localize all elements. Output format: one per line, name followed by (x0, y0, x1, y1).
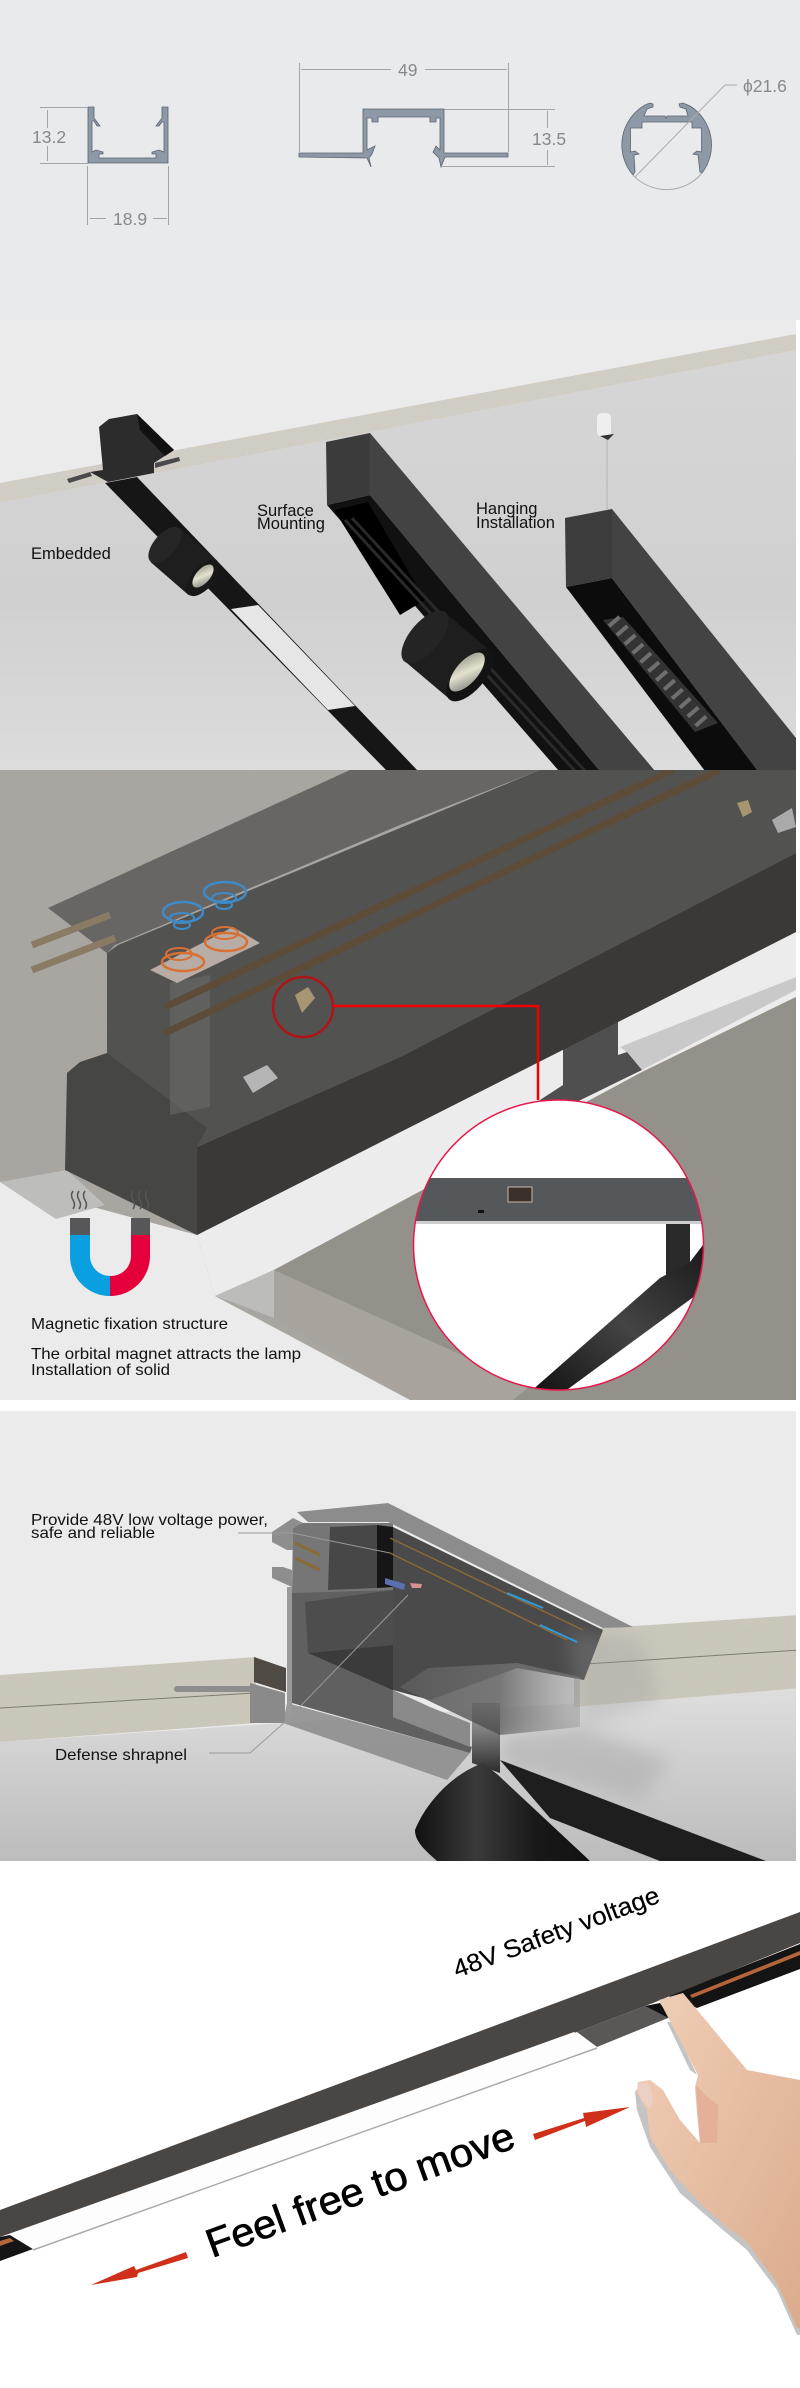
icon: horseshoe magnet (70, 1191, 150, 1296)
diagram: round profile diameter 21.6: ϕ21.6 (743, 76, 787, 96)
text: 48V low voltage power: safe and reliable (31, 1525, 155, 1542)
text: feel free to move: Feel free to move (200, 2114, 520, 2266)
diagram: U profile 18.9 x 13.2: 18.9 (113, 209, 147, 229)
diagram: embedded profile 49 x 13.5: 13.5 (532, 129, 566, 149)
ceiling board (0, 1170, 410, 1400)
panel: magnetic fixation (0, 770, 796, 1400)
text: 48V low voltage power: Provide 48V low voltage power, (31, 1512, 268, 1529)
track cross-section (272, 1503, 670, 1800)
panel: feel free to move (0, 1881, 800, 2335)
text: orbital magnet description: The orbital magnet attracts the lamp (31, 1346, 301, 1363)
fixture: hanging track with louvre (565, 413, 800, 771)
label: surface mounting: Mounting (257, 515, 325, 533)
fixture: embedded track with spot (67, 414, 418, 771)
copper rails (32, 770, 720, 1033)
fixture: surface mounted track with spot (326, 433, 655, 771)
text: magnetic fixation structure: Magnetic fixation structure (31, 1316, 228, 1333)
stand under the housing (540, 1022, 642, 1101)
text: 48V low voltage power (32, 1514, 266, 1538)
panel: 48V low voltage cross-section (0, 1411, 800, 1861)
hand pointing at track (635, 1993, 800, 2335)
diagram: embedded profile 49 x 13.5: 49 (398, 60, 417, 80)
track rail (0, 1912, 800, 2261)
spot lamp and black rail (415, 1703, 766, 1861)
concrete slab (215, 977, 796, 1400)
callout: red circle and leader (273, 977, 538, 1100)
callout: magnified detail (410, 1100, 710, 1392)
text: orbital magnet description (31, 1348, 300, 1375)
track housing (48, 770, 796, 1235)
concrete slabs (0, 1615, 800, 1742)
label: hanging installation: Installation (476, 514, 555, 532)
text: 48V safety voltage: 48V Safety voltage (449, 1881, 663, 1984)
ceiling edge (0, 334, 796, 503)
leader lines (209, 1533, 408, 1753)
text: defense shrapnel: Defense shrapnel (55, 1747, 187, 1764)
diagram: round profile diameter 21.6 (622, 76, 787, 190)
panel: profile dimensions (0, 0, 800, 320)
white channel band (197, 932, 796, 1296)
clips (243, 800, 796, 1093)
arrow: left (91, 2252, 188, 2285)
diagram: U profile 18.9 x 13.2 (32, 107, 168, 229)
label: embedded: Embedded (31, 545, 111, 563)
magnet pad and rings (150, 882, 260, 983)
label: surface mounting: Surface (257, 502, 314, 520)
label: hanging installation: Hanging (476, 500, 537, 518)
panel: installation methods (0, 320, 800, 771)
diagram: embedded profile 49 x 13.5 (299, 60, 566, 167)
diagram: U profile 18.9 x 13.2: 13.2 (32, 127, 66, 147)
arrow: right (533, 2107, 630, 2140)
text: orbital magnet description: Installation of solid (31, 1362, 170, 1379)
